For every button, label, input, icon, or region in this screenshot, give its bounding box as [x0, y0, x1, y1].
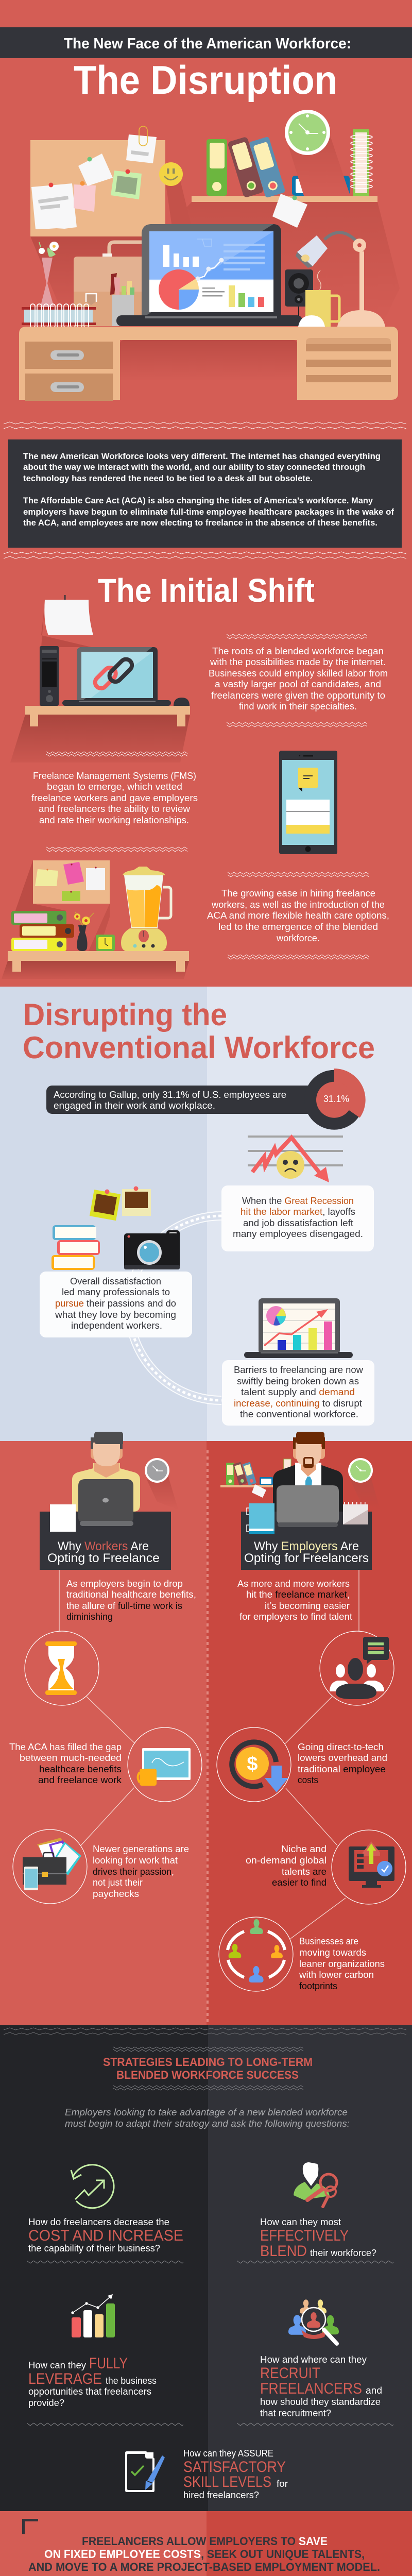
intro paragraph 1: about the way we interact with the world, and our ability to stay connected through — [23, 462, 365, 472]
wall clock — [145, 1458, 169, 1483]
illustration: shelf with blender — [2, 860, 189, 979]
text: aca filled the gap: The ACA has filled the gap — [9, 1742, 122, 1752]
clock shadow — [147, 1473, 178, 1510]
mouse — [174, 698, 190, 706]
vase — [74, 912, 94, 951]
desk — [19, 327, 398, 401]
question: fully leverage: How can they — [28, 2360, 86, 2370]
text: newer generations: not just their — [93, 1877, 143, 1888]
heading: disrupting the conventional workforce: Conventional Workforce — [23, 1030, 375, 1065]
question: cost and increase: COST AND INCREASE — [28, 2227, 183, 2244]
lamp — [296, 232, 385, 327]
intro panel — [8, 439, 402, 548]
icon: hourglass — [25, 1631, 99, 1705]
laptop — [116, 224, 302, 326]
donut 31.1% — [304, 1069, 366, 1130]
text: allure of full-time work: As employers begin to drop — [66, 1579, 183, 1589]
connector lines: workers timeline — [59, 1570, 135, 1845]
text: freelance management systems — [31, 751, 198, 852]
text: easier to find talent — [237, 1579, 352, 1622]
text: leaner organizations: footprints — [299, 1981, 337, 1991]
text: easier to find talent: it’s becoming easier — [265, 1601, 350, 1611]
text: leaner organizations: Businesses are — [299, 1936, 358, 1946]
shelf shadow — [154, 202, 400, 327]
question: recruit freelancers: RECRUIT — [260, 2365, 320, 2382]
icon: team ring — [219, 1917, 293, 1991]
text: aca filled the gap: healthcare benefits — [39, 1764, 122, 1774]
text: aca filled the gap: between much-needed — [20, 1753, 122, 1763]
header panel: why employers: Why Employers Are — [254, 1539, 359, 1553]
spiral book — [22, 304, 96, 328]
bracket: top left — [22, 2519, 38, 2534]
text: roots of blended workforce — [209, 634, 388, 727]
question: fully leverage: FULLY — [89, 2355, 128, 2372]
text: niche and on-demand: Niche and — [281, 1844, 327, 1854]
icon: monitor with upload — [332, 1830, 406, 1904]
text: going direct-to-tech: costs — [298, 1775, 318, 1785]
text box: great recession: When the Great Recession — [242, 1196, 354, 1206]
text box: barriers to freelancing: talent supply and demand — [241, 1387, 355, 1397]
stat callout: gallup: According to Gallup, only 31.1% of U.S. employees are — [54, 1090, 286, 1100]
heading: strategies: STRATEGIES LEADING TO LONG-TERM — [103, 2056, 313, 2069]
icon: team and chat bubble — [320, 1631, 394, 1705]
speaker — [285, 269, 313, 316]
header panel: why workers: Opting to Freelance — [47, 1551, 160, 1565]
text: growing ease in hiring: ACA and more flexible health care options, — [207, 910, 389, 921]
heading: disrupting the conventional workforce — [23, 997, 375, 1065]
divider — [4, 421, 406, 430]
question: effectively blend: How can they most — [260, 2217, 341, 2227]
heading: strategies — [103, 2046, 313, 2091]
question: effectively blend — [237, 2217, 393, 2264]
small clock — [96, 935, 115, 951]
icon: recruiting magnifier — [288, 2299, 339, 2344]
question: effectively blend: BLEND — [260, 2243, 307, 2260]
text: aca filled the gap: and freelance work — [38, 1775, 122, 1785]
binder shadow — [88, 904, 110, 953]
header panel: why workers — [40, 1504, 171, 1570]
mouse — [298, 315, 325, 327]
question: satisfactory skill levels — [183, 2448, 288, 2500]
text box: overall dissatisfaction — [40, 1272, 192, 1337]
illustration: wall calendar note — [41, 595, 93, 647]
shelf board — [8, 951, 189, 972]
intro paragraph 1: The new American Workforce looks very different. The internet has changed everything — [23, 451, 381, 461]
pin board — [33, 860, 110, 904]
text: aca filled the gap — [9, 1742, 122, 1785]
callout: freelancers allow employers — [28, 2535, 380, 2573]
header panel: why employers — [241, 1502, 372, 1570]
icon: dollar cost down — [217, 1727, 291, 1802]
question: fully leverage: opportunities that freelancers — [28, 2386, 151, 2397]
worker body — [72, 1463, 140, 1512]
road connector — [129, 1216, 221, 1400]
small shelf with binders — [220, 1459, 291, 1498]
main title: The Disruption — [74, 57, 337, 103]
employer laptop — [277, 1485, 339, 1523]
text box: barriers to freelancing: Barriers to freelancing are now — [234, 1365, 364, 1375]
text: niche and on-demand: talents are — [282, 1867, 327, 1877]
title bar — [0, 27, 412, 58]
text: freelance management systems: began to emerge, which vetted — [47, 782, 182, 792]
shelf — [192, 196, 377, 202]
wall clock — [285, 110, 330, 155]
desk shelf — [25, 706, 190, 726]
illustration: computer desk with chain link — [10, 646, 190, 762]
clock shadow — [350, 1473, 380, 1510]
header panel: why employers: Opting for Freelancers — [244, 1551, 369, 1565]
icon: checklist and pen — [125, 2451, 165, 2492]
icon: camera — [124, 1230, 180, 1269]
text: growing ease in hiring — [207, 872, 389, 960]
text: allure of full-time work: the allure of full-time work is — [66, 1601, 182, 1611]
question: fully leverage — [27, 2355, 183, 2427]
question: recruit freelancers: how should they standardize — [260, 2397, 381, 2407]
text: growing ease in hiring: led to the emergence of the blended — [218, 922, 378, 932]
text: going direct-to-tech: traditional employee — [298, 1764, 386, 1774]
clock shadow — [288, 134, 350, 196]
spiral notebook — [351, 129, 372, 196]
illustration: office desk scene — [19, 110, 400, 401]
header panel: why workers: Why Workers Are — [58, 1539, 149, 1553]
text: freelance management systems: and freelancers the ability to review — [39, 804, 191, 814]
divider — [4, 2027, 406, 2036]
text: easier to find talent: As more and more workers — [237, 1579, 350, 1589]
text: roots of blended workforce: Businesses could employ skilled labor from — [209, 668, 388, 679]
falling note — [272, 194, 307, 228]
white note — [78, 154, 113, 186]
text: roots of blended workforce: a vastly larger pool of candidates, and — [215, 679, 381, 689]
icon: laptop with growth chart — [244, 1298, 353, 1358]
pencil holder — [110, 273, 134, 326]
question: fully leverage: the business — [106, 2376, 157, 2386]
corkboard — [30, 140, 165, 236]
icon: growth loop — [71, 2165, 114, 2208]
donut 31.1%: 31.1% — [323, 1094, 349, 1104]
intro paragraph 1: technology has rendered the need to be tied to a desk all but obsolete. — [23, 473, 313, 483]
text box: overall dissatisfaction: pursue their passions and do — [55, 1298, 176, 1309]
intro paragraph 2: The Affordable Care Act (ACA) is also changing the tides of America’s workforce. Many — [23, 496, 373, 505]
text: easier to find talent: for employers to find talent — [239, 1612, 352, 1622]
callout: freelancers allow employers: AND MOVE TO A MORE PROJECT-BASED EMPLOYMENT MODEL. — [28, 2561, 380, 2573]
illustration: worker with laptop — [72, 1432, 178, 1512]
worker laptop — [78, 1479, 133, 1522]
title line: The New Face of the American Workforce: — [64, 36, 351, 52]
text: growing ease in hiring: workforce. — [276, 933, 320, 943]
green binder — [207, 139, 227, 196]
connector lines: employers timeline — [285, 1570, 359, 1939]
wall clock — [348, 1458, 373, 1483]
text: allure of full-time work: traditional healthcare benefits, — [66, 1589, 196, 1600]
text box: overall dissatisfaction: what they love by becoming — [55, 1310, 176, 1320]
text box: great recession: many employees disengaged. — [233, 1229, 363, 1239]
heading: strategies: BLENDED WORKFORCE SUCCESS — [116, 2069, 299, 2081]
intro paragraph 2: the ACA, and employees are now electing to freelance in the absence of these benefits. — [23, 518, 377, 528]
text: roots of blended workforce: with the possibilities made by the internet. — [210, 657, 386, 667]
blender — [121, 867, 171, 952]
background: red hero and initial shift section — [0, 0, 412, 987]
text box: great recession: and job dissatisfaction left — [243, 1218, 353, 1228]
intro paragraph 1 — [23, 451, 381, 483]
text box: barriers to freelancing — [222, 1360, 374, 1426]
text: niche and on-demand — [246, 1844, 327, 1888]
text: going direct-to-tech — [298, 1742, 387, 1785]
vase with flowers — [39, 242, 59, 308]
icon: dollar cost down: $ — [247, 1753, 258, 1775]
question: fully leverage: LEVERAGE — [28, 2370, 102, 2387]
question: effectively blend: their workforce? — [310, 2248, 376, 2258]
intro paragraph 2: employers have begun to eliminate full-time employee healthcare packages in the wake of — [23, 507, 394, 517]
blue binder — [249, 137, 285, 198]
brown binder — [227, 137, 264, 198]
text: newer generations: drives their passion, — [93, 1867, 174, 1877]
question: satisfactory skill levels: How can they ASSURE — [183, 2448, 273, 2459]
text: leaner organizations: leaner organizations — [299, 1959, 385, 1969]
text: leaner organizations — [299, 1936, 385, 1991]
text: freelance management systems: freelance workers and gave employers — [31, 793, 198, 803]
question: effectively blend: EFFECTIVELY — [260, 2227, 349, 2244]
question: satisfactory skill levels: SKILL LEVELS — [183, 2473, 271, 2490]
text: growing ease in hiring: The growing ease in hiring freelance — [221, 888, 375, 899]
text box: great recession: hit the labor market , layoffs — [241, 1207, 355, 1217]
torn note — [31, 182, 77, 229]
background: closing section — [0, 2511, 412, 2576]
briefcase — [74, 242, 142, 326]
icon: smartphone — [279, 751, 337, 854]
shelf shadow — [2, 961, 189, 979]
question: recruit freelancers — [237, 2354, 393, 2427]
intro paragraph 2 — [23, 496, 394, 528]
question: cost and increase: How do freelancers decrease the — [28, 2217, 169, 2227]
corkboard shadow — [30, 236, 165, 327]
employer head — [293, 1432, 325, 1468]
question: cost and increase: the capability of their business? — [28, 2243, 160, 2253]
green framed photo — [111, 169, 142, 199]
text: easier to find talent: hit the freelance market , — [246, 1589, 350, 1600]
icon: tablet and mug — [128, 1727, 202, 1802]
callout: freelancers allow employers: ON FIXED EMPLOYEE COSTS, SEEK OUT UNIQUE TALENTS, — [44, 2548, 365, 2561]
mug — [305, 290, 339, 327]
text: newer generations: Newer generations are — [93, 1844, 189, 1854]
pink note — [74, 181, 96, 212]
computer tower — [40, 646, 59, 706]
text: freelance management systems: Freelance Management Systems (FMS) — [33, 771, 196, 781]
text box: barriers to freelancing: the conventional workforce. — [240, 1409, 358, 1419]
background: strategies section — [0, 2025, 412, 2511]
text: niche and on-demand: easier to find — [272, 1877, 327, 1888]
icon: bar chart — [71, 2294, 115, 2337]
shirt and tie — [295, 1463, 321, 1488]
horizontal binder — [292, 176, 350, 196]
question: satisfactory skill levels: for — [277, 2479, 288, 2489]
text box: overall dissatisfaction: led many professionals to — [62, 1287, 170, 1297]
text: allure of full-time work: diminishing — [66, 1612, 113, 1622]
text: newer generations: paychecks — [93, 1889, 139, 1899]
text: employers intro — [65, 2107, 350, 2129]
text box: overall dissatisfaction: Overall dissatisfaction — [70, 1276, 161, 1286]
question: recruit freelancers: and — [366, 2385, 382, 2396]
suit — [273, 1465, 343, 1520]
text: employers intro: must begin to adapt their strategy and ask the following questions: — [65, 2119, 350, 2129]
divider — [4, 551, 406, 560]
icon: briefcase with documents — [13, 1829, 87, 1904]
clipped note — [126, 126, 157, 163]
text: roots of blended workforce: freelancers were given the opportunity to — [211, 690, 385, 701]
worker head — [91, 1432, 123, 1466]
heading: the initial shift: The Initial Shift — [98, 572, 315, 609]
question: satisfactory skill levels: SATISFACTORY — [183, 2459, 286, 2476]
text box: overall dissatisfaction: independent workers. — [71, 1320, 162, 1331]
question: recruit freelancers: FREELANCERS — [260, 2380, 362, 2397]
worker neck — [94, 1463, 119, 1478]
icon: polaroid photos — [90, 1186, 151, 1221]
text: roots of blended workforce: find work in their specialties. — [239, 701, 357, 711]
text: niche and on-demand: on-demand global — [246, 1855, 327, 1866]
text: newer generations — [93, 1844, 189, 1899]
heading: the initial shift: The Initial Shift — [99, 573, 316, 610]
background: disrupting section — [0, 987, 412, 1441]
icon: person with magnifiers — [294, 2162, 337, 2207]
smiley shadow — [165, 180, 197, 248]
laptop with chain link — [62, 647, 171, 706]
text: newer generations: looking for work that — [93, 1855, 178, 1866]
illustration: employer at desk — [0, 1432, 412, 2576]
callout: freelancers allow employers: FREELANCERS ALLOW EMPLOYERS TO SAVE — [82, 2535, 328, 2548]
heading: disrupting the conventional workforce: Disrupting the — [23, 997, 227, 1032]
text: employers intro: Employers looking to take advantage of a new blended workforce — [65, 2107, 348, 2117]
smiley — [159, 162, 183, 186]
text: freelance management systems: and rate their working relationships. — [39, 815, 189, 825]
stat callout: gallup — [46, 1069, 366, 1130]
stat callout: gallup: engaged in their work and workplace. — [54, 1100, 215, 1111]
text: leaner organizations: with lower carbon — [299, 1970, 374, 1980]
question: recruit freelancers: How and where can they — [260, 2354, 367, 2365]
text: roots of blended workforce: The roots of a blended workforce began — [212, 646, 384, 656]
text box: barriers to freelancing: increase, continuing to disrupt — [234, 1398, 362, 1409]
question: recruit freelancers: that recruitment? — [260, 2408, 331, 2418]
question: satisfactory skill levels: hired freelancers? — [183, 2490, 259, 2500]
icon: stacked books — [52, 1225, 100, 1270]
text: going direct-to-tech: Going direct-to-tech — [298, 1742, 384, 1752]
background: workers and employers section — [0, 1441, 412, 2025]
text: growing ease in hiring: workers, as well as the introduction of the — [211, 900, 385, 910]
text: leaner organizations: moving towards — [299, 1947, 366, 1958]
shelf shadow — [10, 715, 190, 762]
board shadow — [11, 860, 66, 922]
text: going direct-to-tech: lowers overhead and — [298, 1753, 387, 1763]
text box: barriers to freelancing: swiftly being broken down as — [237, 1376, 359, 1386]
stacked binders — [11, 911, 74, 951]
question: fully leverage: provide? — [28, 2398, 64, 2408]
icon: falling chart with sad face — [248, 1136, 343, 1182]
text: allure of full-time work — [66, 1579, 196, 1622]
text box: great recession — [221, 1185, 374, 1251]
question: cost and increase — [27, 2217, 183, 2264]
